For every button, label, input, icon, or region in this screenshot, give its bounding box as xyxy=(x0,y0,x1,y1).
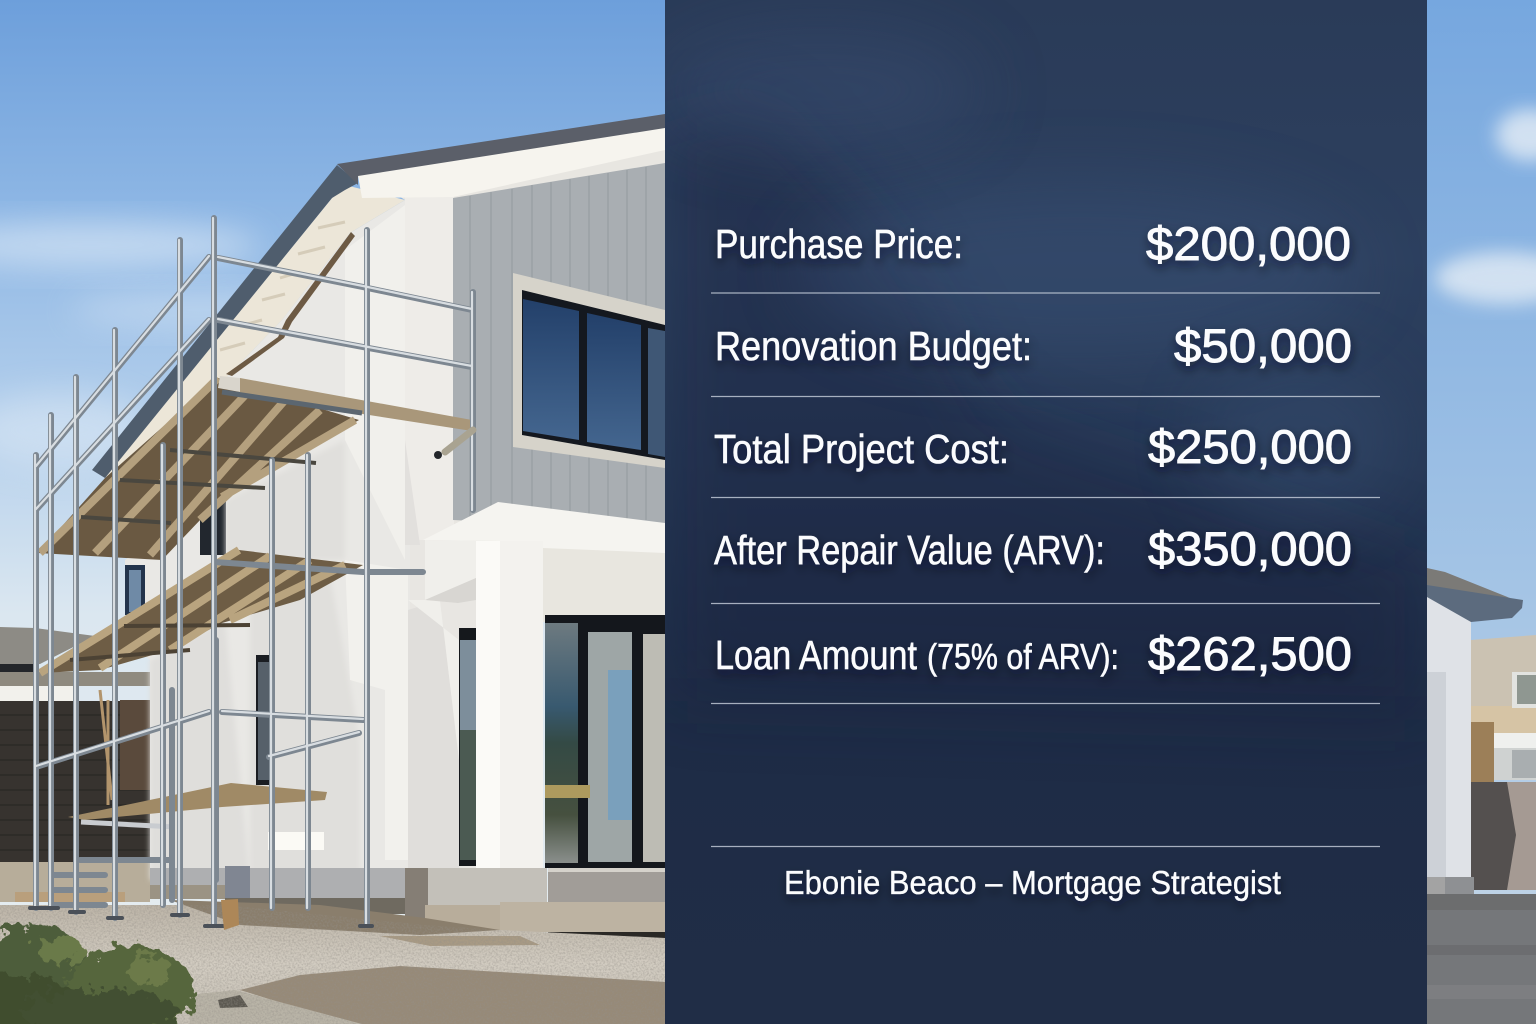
row: after repair value: $350,000 xyxy=(1148,522,1352,575)
row: total project cost: Total Project Cost: xyxy=(714,426,1009,472)
wall base band xyxy=(150,866,429,918)
fence xyxy=(1471,782,1536,890)
white house corner xyxy=(1427,568,1523,895)
scaffold deck 2 xyxy=(40,550,363,673)
backing masses that close gaps behind the house xyxy=(401,150,665,868)
tan building xyxy=(1471,635,1536,782)
row: purchase price: Purchase Price: xyxy=(715,221,963,267)
row: loan amount: $262,500 xyxy=(1148,627,1352,680)
scaffold deck 3 xyxy=(68,690,327,827)
roof rake trim xyxy=(92,165,358,478)
cardboard box xyxy=(221,899,239,930)
sliding glass door xyxy=(545,615,665,868)
row: loan amount: (75% of ARV): xyxy=(927,636,1119,677)
shrub xyxy=(0,925,195,1024)
scaffold deck 1 xyxy=(38,376,472,560)
footer credit: Ebonie Beaco – Mortgage Strategist xyxy=(784,864,1281,901)
row: purchase price xyxy=(715,217,1351,270)
row: purchase price: $200,000 xyxy=(1146,217,1351,270)
main roof edge xyxy=(337,114,665,185)
grey board-and-batten siding xyxy=(453,163,665,530)
row: after repair value xyxy=(714,522,1352,575)
stucco wall xyxy=(125,195,459,895)
white fascia xyxy=(358,128,665,198)
asphalt driveway xyxy=(1427,894,1536,1024)
balcony volume and pillar xyxy=(423,502,665,869)
row: loan amount xyxy=(715,627,1352,680)
row: renovation budget xyxy=(715,319,1352,372)
row: renovation budget: $50,000 xyxy=(1174,319,1352,372)
row: after repair value: After Repair Value (ARV): xyxy=(714,527,1105,573)
main house under renovation xyxy=(0,114,665,1024)
dividers xyxy=(711,293,1380,846)
neighbouring dark house xyxy=(0,627,150,902)
row: total project cost xyxy=(714,420,1352,473)
right-side neighbouring property xyxy=(1427,568,1536,1024)
scaffold pipes xyxy=(30,218,473,926)
row: loan amount: Loan Amount xyxy=(715,632,918,678)
gravel ground xyxy=(0,900,665,1024)
row: total project cost: $250,000 xyxy=(1148,420,1352,473)
navy translucent data panel xyxy=(660,0,1427,1024)
tall side window xyxy=(459,628,476,866)
upper window xyxy=(513,273,665,468)
roof rake soffit xyxy=(105,185,405,477)
row: renovation budget: Renovation Budget: xyxy=(715,323,1032,369)
plinth and steps xyxy=(425,868,665,938)
